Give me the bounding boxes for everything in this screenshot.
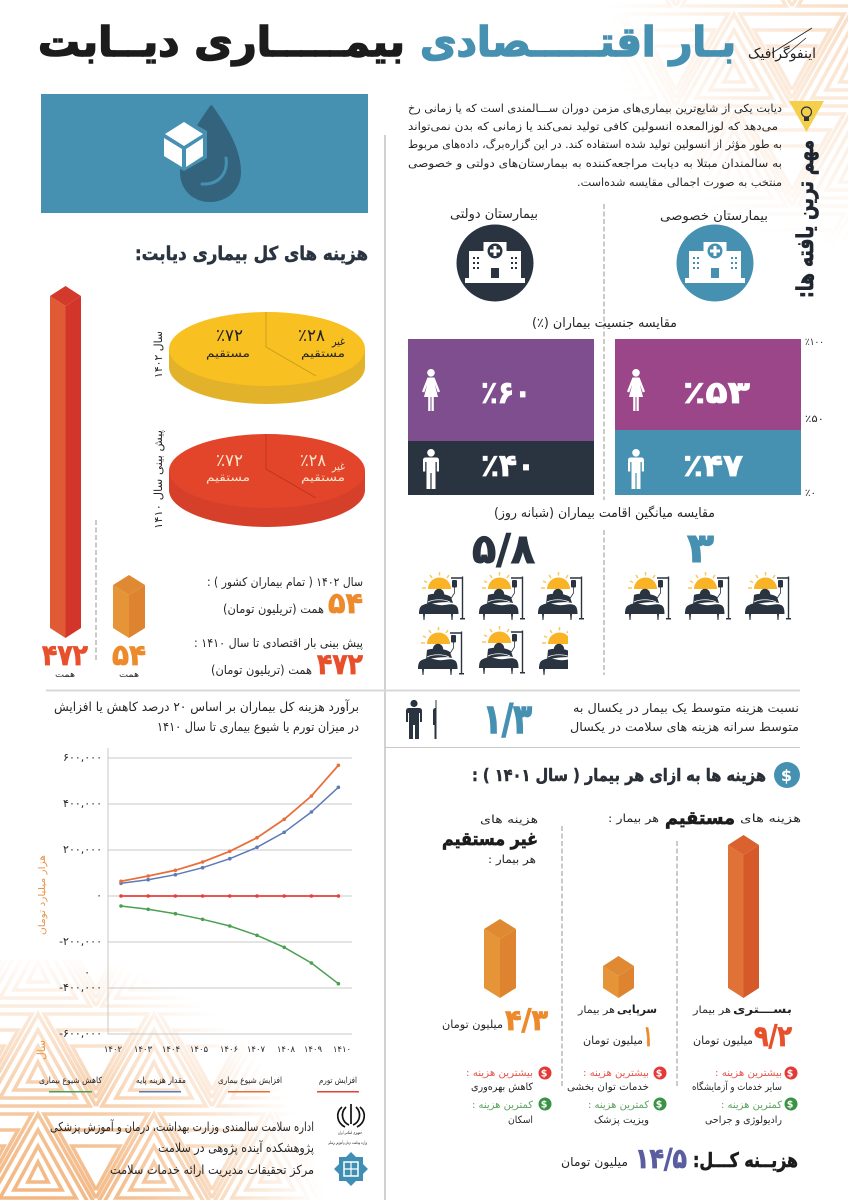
total cost [561, 1142, 798, 1175]
cost list: indirect [466, 1066, 552, 1126]
y axis title: هزار میلیارد تومان [37, 855, 48, 935]
label: inpatient value: هر بیمار [692, 1005, 731, 1016]
logo: university [334, 1152, 368, 1186]
value: male share: ٪۴۷ [683, 448, 743, 484]
line chart [35, 748, 352, 1060]
pie label: direct [206, 326, 250, 360]
pie label: indirect: مستقیم [301, 347, 345, 360]
label: private hospital: بیمارستان خصوصی [660, 209, 768, 224]
pie label: direct [206, 451, 250, 484]
cost list: inpatient: سایر خدمات و آزمایشگاه [692, 1080, 782, 1093]
pie label: indirect: غیر [331, 335, 345, 348]
chart legend: افزایش تورم [319, 1076, 357, 1086]
subheading: direct costs: مستقیم [665, 808, 735, 829]
icon: light bulb [789, 101, 824, 132]
percent axis: ٪۱۰۰ [805, 337, 824, 348]
total cost: میلیون تومان [561, 1155, 628, 1170]
organizations text: پژوهشکده آینده پژوهی در سلامت [158, 1140, 314, 1156]
chart: gender public [408, 339, 594, 495]
chart grid [108, 748, 352, 1034]
bar: 472 trillion [50, 286, 81, 638]
y axis labels: -۶۰۰,۰۰۰ [59, 1027, 102, 1040]
cost list: indirect: کاهش بهره‌وری [471, 1082, 533, 1093]
subheading: direct costs: هر بیمار : [608, 812, 659, 825]
x axis labels [104, 1045, 351, 1055]
x axis labels: ۱۴۰۵ [190, 1045, 209, 1055]
chart legend [39, 1076, 359, 1092]
intro text: می‌دهد که لوزالمعده انسولین کافی تولید نمی‌کند یا زمانی که بدن نمی‌تواند [408, 120, 778, 133]
label: outpatient value: سرپایی [617, 1003, 657, 1016]
y axis labels: ۰ [96, 889, 102, 902]
x axis labels: ۱۴۰۴ [162, 1045, 180, 1055]
percent axis: ٪۵۰ [805, 414, 824, 425]
y axis labels: ۲۰۰,۰۰۰ [63, 843, 102, 856]
title: blue part: بـار اقتـــــصادی [420, 18, 736, 66]
text block: 1402 cost: همت (تریلیون تومان) [223, 602, 324, 617]
cost list: indirect: اسکان [508, 1115, 533, 1126]
pie: 1402 [169, 312, 365, 404]
pie: 1410 forecast [169, 434, 365, 527]
label: indirect value [442, 1003, 548, 1037]
intro text: دیابت یکی از شایع‌ترین بیماری‌های مزمن دوران ســـالمندی است که یا زمانی رخ [408, 102, 782, 115]
icon: dollar [774, 762, 800, 788]
title [38, 18, 736, 66]
cost list: outpatient: ویزیت پزشک [594, 1115, 649, 1126]
chart legend: افزایش شیوع بیماری [218, 1076, 282, 1086]
subheading: indirect costs: هزینه های [480, 813, 538, 826]
title: black part: بیمـــــاری دیــابت [38, 18, 405, 66]
pie caption: 1410: پیش بینی سال ۱۴۱۰ [152, 430, 165, 529]
layout dividers [46, 135, 800, 1200]
x axis labels: ۱۴۱۰ [333, 1045, 351, 1055]
y axis labels: -۲۰۰,۰۰۰ [59, 935, 102, 948]
percent axis [805, 337, 824, 499]
x axis labels: ۱۴۰۸ [277, 1045, 296, 1055]
label: inpatient value [692, 1003, 792, 1053]
text block: 1410 forecast [194, 636, 363, 681]
series: lower prevalence [119, 904, 340, 986]
x axis labels: ۱۴۰۶ [220, 1045, 238, 1055]
label: outpatient value: هر بیمار [577, 1005, 615, 1016]
subheading: direct costs: هزینه های [740, 812, 801, 825]
heading: estimate chart: در میزان تورم یا شیوع بیماری تا سال ۱۴۱۰ [157, 719, 359, 735]
text block: 1410 forecast: پیش بینی بار اقتصادی تا سال ۱۴۱۰ : [194, 636, 363, 651]
cost list: inpatient: کمترین هزینه : [721, 1100, 782, 1111]
bar: indirect [484, 919, 516, 998]
heading: stay comparison: مقایسه میانگین اقامت بیماران (شبانه روز) [494, 505, 715, 521]
icon: dollar: $ [781, 766, 792, 785]
subheading: indirect costs [442, 813, 538, 866]
chart legend: مقدار هزینه پایه [136, 1076, 186, 1086]
bar: 54 trillion [113, 575, 145, 638]
icon: public hospital [456, 224, 534, 302]
x axis labels: ۱۴۰۳ [134, 1045, 153, 1055]
text block: 1402 cost [207, 575, 363, 620]
organizations text [50, 1119, 314, 1178]
text block: 1402 cost: ۵۴ [328, 586, 363, 620]
label: indirect value: میلیون تومان [442, 1018, 503, 1031]
x axis labels: ۱۴۰۲ [104, 1045, 123, 1055]
y axis labels: ۰ [84, 966, 90, 979]
value: male share: ٪۴۰ [481, 448, 535, 484]
series: higher prevalence [119, 764, 340, 883]
heading: estimate chart [54, 699, 359, 735]
total cost: ۱۴/۵ [635, 1142, 687, 1175]
x axis labels: ۱۴۰۷ [247, 1045, 266, 1055]
heading: estimate chart: برآورد هزینه کل بیماران بر اساس ۲۰ درصد کاهش یا افزایش [54, 699, 359, 715]
intro text [408, 102, 782, 189]
cost list: inpatient: بیشترین هزینه : [715, 1068, 782, 1079]
bar label: 54: ۵۴ [112, 638, 146, 672]
cost list: outpatient: خدمات توان بخشی [567, 1082, 649, 1093]
label: outpatient value: میلیون تومان [583, 1034, 643, 1047]
bar: inpatient [728, 835, 759, 998]
x axis labels: ۱۴۰۹ [304, 1045, 323, 1055]
cost list: inpatient: رادیولوژی و جراحی [705, 1115, 782, 1126]
icon: man [628, 449, 644, 489]
pie label: indirect: ٪۲۸ [298, 326, 325, 346]
heading: cost per patient: هزینه ها به ازای هر بیمار ( سال ۱۴۰۱ ) : [472, 766, 766, 786]
icons: private hospital beds [625, 572, 791, 620]
organizations text: اداره سلامت سالمندی وزارت بهداشت، درمان و آموزش پزشکی [50, 1119, 314, 1135]
icon: man [423, 449, 439, 489]
icon: people ratio [406, 700, 436, 739]
label: inpatient value: میلیون تومان [693, 1034, 753, 1047]
pie label: direct: مستقیم [206, 471, 250, 484]
icons: public hospital beds [418, 572, 585, 675]
cost list: outpatient: بیشترین هزینه : [583, 1068, 649, 1079]
cost list: inpatient [692, 1066, 798, 1126]
bar label: 54: همت [119, 670, 139, 679]
label: public hospital: بیمارستان دولتی [450, 207, 538, 222]
organizations text: مرکز تحقیقات مدیریت ارائه خدمات سلامت [110, 1162, 314, 1178]
pie label: direct: ٪۷۲ [216, 451, 243, 471]
panel: hospital types [450, 207, 768, 302]
icon: woman [627, 369, 645, 411]
cost list: indirect: کمترین هزینه : [472, 1100, 533, 1111]
emblem: Iran: وزارت بهداشت، درمان و آموزش پزشکی [328, 1140, 367, 1146]
text block: 1402 cost: سال ۱۴۰۲ ( تمام بیماران کشور ) : [207, 575, 363, 590]
bar label: 472: ۴۷۲ [42, 638, 88, 672]
chart legend: کاهش شیوع بیماری [39, 1076, 103, 1086]
chart: gender private [615, 339, 801, 495]
heading: key findings: مهم ترین یافته ها: [793, 140, 819, 298]
cost list: outpatient: کمترین هزینه : [588, 1100, 649, 1111]
subheading: direct costs [608, 808, 801, 829]
emblem: Iran: جمهوری اسلامی ایران [338, 1131, 362, 1136]
text block: ratio: متوسط سرانه هزینه های سلامت در یکسال [570, 720, 799, 735]
pie label: indirect: ٪۲۸ [300, 451, 326, 471]
panel: key findings [408, 101, 824, 298]
y axis labels: -۴۰۰,۰۰۰ [59, 981, 102, 994]
text block: ratio [570, 701, 799, 735]
text block: 1410 forecast: ۴۷۲ [317, 647, 363, 681]
icon: private hospital [676, 224, 754, 302]
cost list: indirect: بیشترین هزینه : [466, 1068, 533, 1079]
heading: total costs: هزینه های کل بیماری دیابت: [135, 243, 368, 265]
pie label: indirect: غیر [331, 460, 345, 473]
icon: sugar cube [160, 118, 207, 171]
icon: drop [180, 105, 241, 202]
emblem: Iran [328, 1104, 367, 1146]
y axis labels: ۴۰۰,۰۰۰ [63, 797, 102, 810]
pie label: direct: مستقیم [206, 347, 250, 360]
value: cost ratio: ۱/۳ [483, 695, 532, 743]
bar label: 472: همت [55, 670, 75, 679]
text block: ratio: نسبت هزینه متوسط یک بیمار در یکسال به [573, 701, 799, 716]
label: outpatient value: ۱ [644, 1019, 652, 1053]
value: female share: ٪۵۳ [683, 375, 750, 411]
x axis title: سال [35, 1040, 48, 1060]
icon: woman [422, 369, 440, 411]
label: outpatient value [577, 1003, 657, 1053]
cost list: outpatient [567, 1066, 666, 1126]
y axis labels: ۶۰۰,۰۰۰ [63, 751, 102, 764]
label: indirect value: ۴/۳ [505, 1003, 548, 1037]
pie label: direct: ٪۷۲ [216, 326, 243, 346]
label: inpatient value: ۹/۲ [754, 1019, 792, 1053]
intro text: منتخب به صورت اجمالی مقایسه شده‌است. [577, 176, 782, 189]
infographic logo [748, 28, 816, 62]
value: private stay: ۳ [687, 524, 714, 572]
text block: 1410 forecast: همت (تریلیون تومان) [211, 663, 312, 678]
total cost: هزیــنه کـــل: [693, 1148, 798, 1172]
subheading: indirect costs: هر بیمار : [488, 853, 536, 866]
series: base cost [119, 786, 340, 885]
percent axis: ٪۰ [805, 488, 816, 499]
series: inflation [119, 894, 340, 898]
pie caption: 1402: سال ۱۴۰۲ [152, 331, 165, 378]
subheading: indirect costs: غیر مستقیم [442, 829, 538, 850]
pie label: indirect [300, 451, 345, 484]
value: public stay: ۵/۸ [472, 525, 535, 573]
bar: outpatient [603, 956, 634, 998]
value: female share: ٪۶۰ [481, 375, 531, 411]
banner: diabetes [41, 94, 368, 213]
pie label: indirect: مستقیم [301, 471, 345, 484]
pie label: indirect [298, 326, 345, 360]
heading: gender comparison: مقایسه جنسیت بیماران (٪) [532, 316, 677, 331]
y axis labels [59, 751, 102, 1040]
intro text: به سالمندان مبتلا به دیابت مراجعه‌کننده به بیمارستان‌های دولتی و خصوصی [408, 157, 782, 170]
infographic logo: اینفوگرافیک [748, 45, 816, 62]
label: inpatient value: بســـتری [733, 1003, 792, 1016]
intro text: به طور مؤثر از انسولین تولید شده استفاده کند. در این گزاره‌برگ، داده‌های مربوط [408, 138, 782, 151]
